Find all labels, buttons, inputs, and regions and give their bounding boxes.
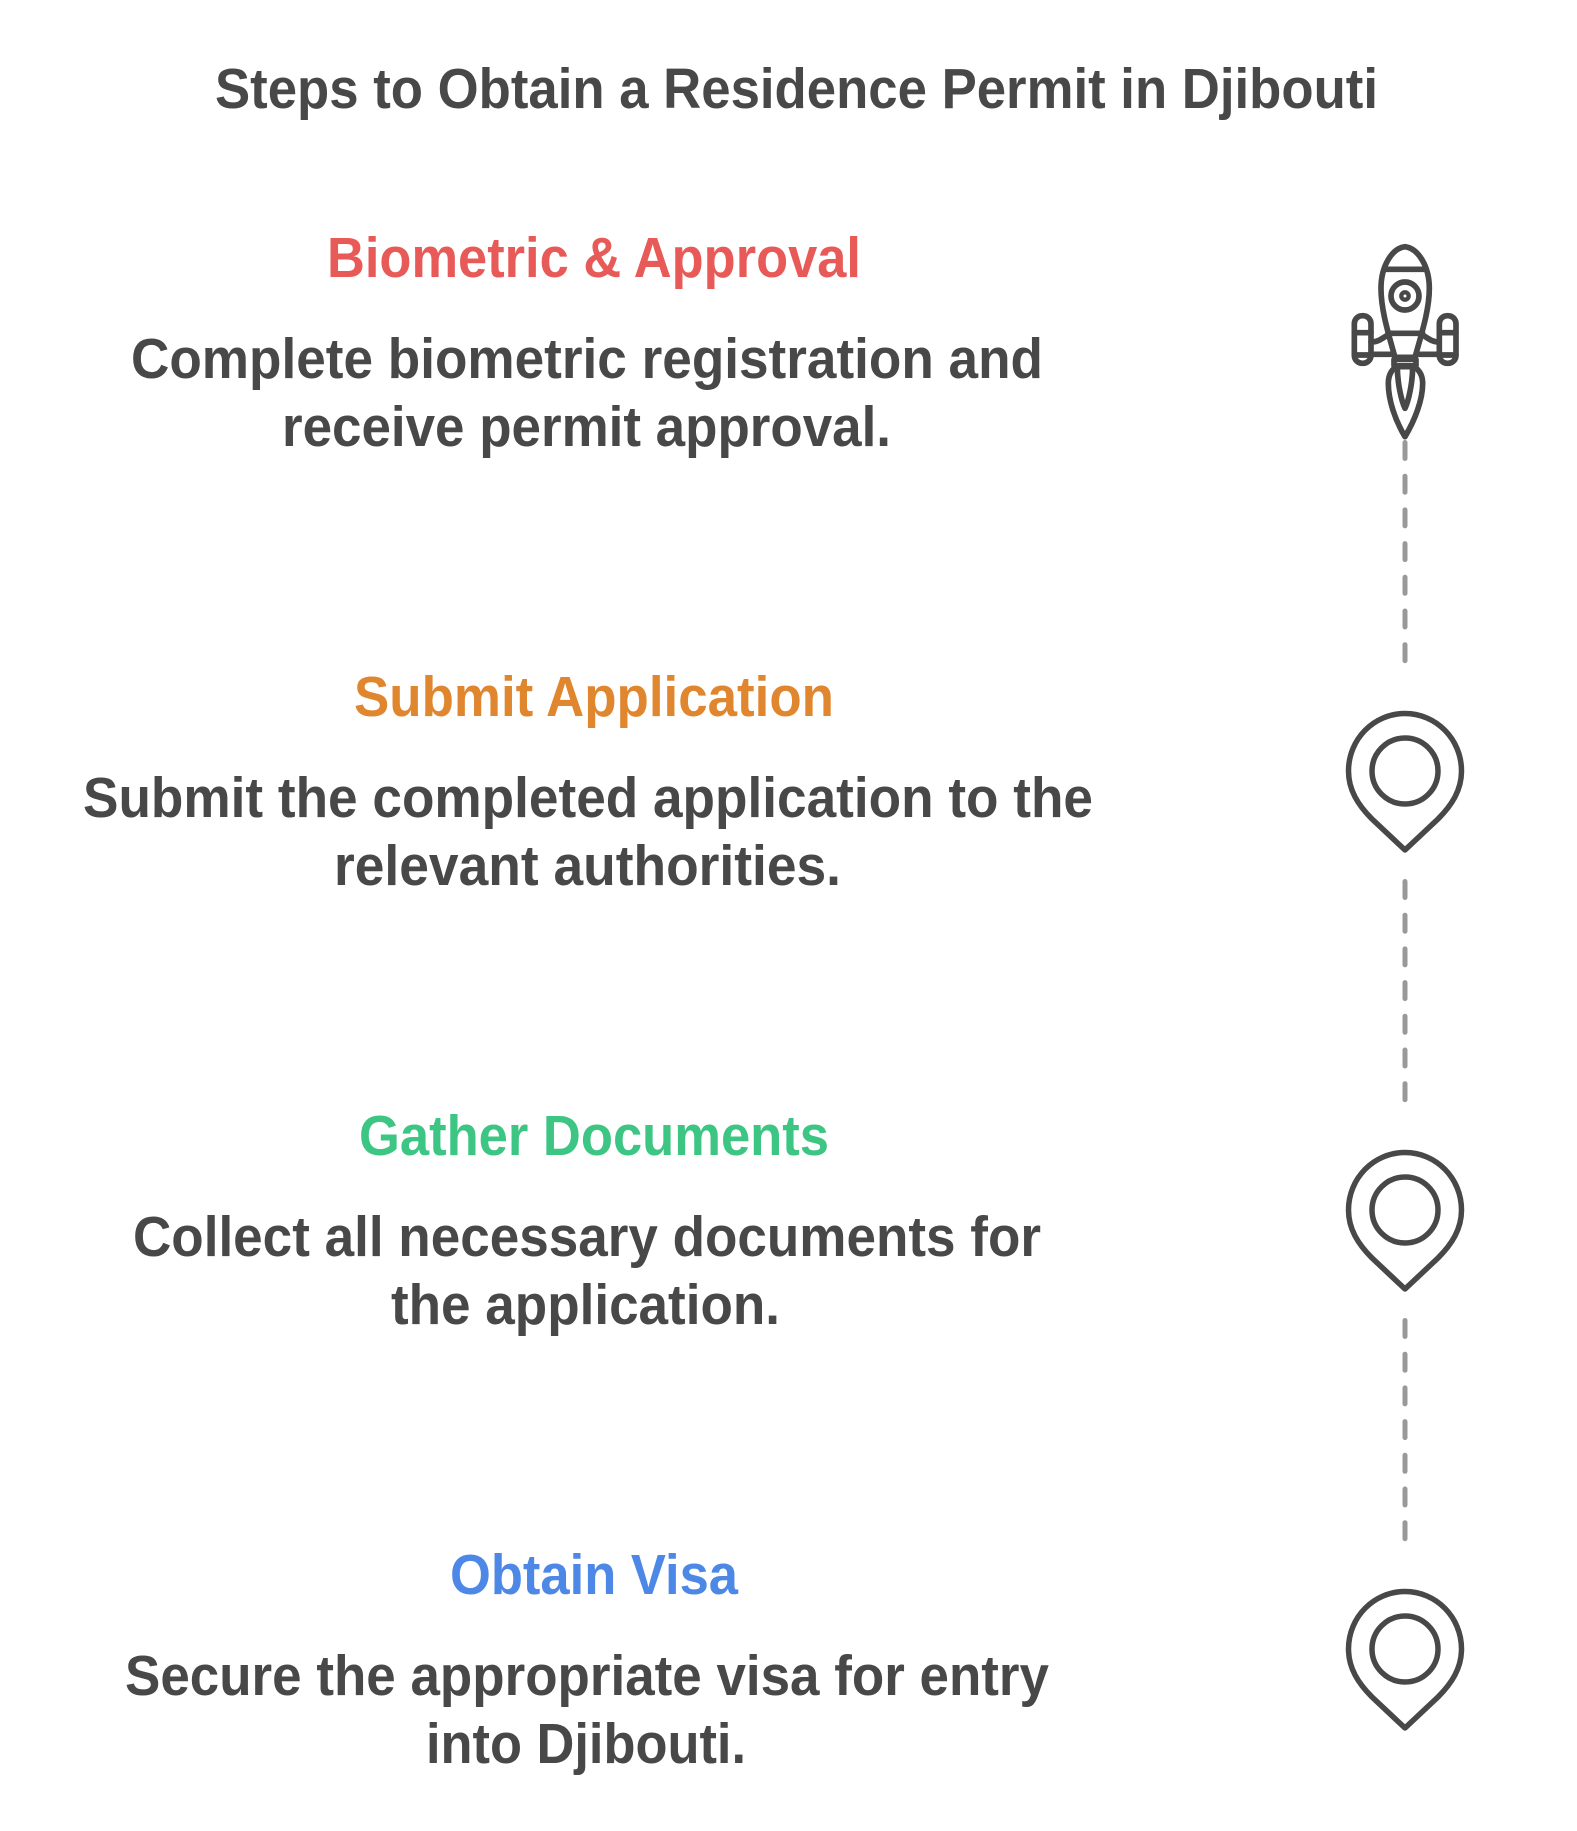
description: biometric registration: Complete biometric registration and [131, 327, 1043, 391]
step: Submit Application [83, 665, 1093, 898]
step: Biometric & Approval [131, 226, 1043, 459]
heading: Gather Documents: Gather Documents [359, 1104, 829, 1168]
connector: pin 1 to pin 2 [1402, 882, 1408, 1101]
description: secure visa: Secure the appropriate visa for entry [125, 1644, 1049, 1708]
step: Gather Documents [133, 1104, 1041, 1337]
description: collect documents: Collect all necessary documents for [133, 1205, 1041, 1269]
icon: location pin 3 [1348, 1592, 1462, 1728]
title: Steps to Obtain a Residence Permit in Djibouti [215, 57, 1378, 121]
connector: rocket to pin [1402, 442, 1408, 662]
heading: Submit Application: Submit Application [354, 665, 834, 729]
description: submit application [83, 766, 1093, 898]
connector: pin 2 to pin 3 [1402, 1320, 1408, 1540]
description: collect documents [133, 1205, 1041, 1337]
description: secure visa: into Djibouti. [426, 1712, 746, 1776]
heading: Obtain Visa: Obtain Visa [450, 1543, 739, 1607]
description: biometric registration: receive permit approval. [282, 395, 891, 459]
icon: location pin 2 [1348, 1152, 1462, 1289]
description: secure visa [125, 1644, 1049, 1776]
description: submit application: Submit the completed application to the [83, 766, 1093, 830]
icon: location pin 1 [1348, 714, 1462, 850]
icon: rocket [1354, 247, 1456, 437]
description: collect documents: the application. [391, 1273, 780, 1337]
description: biometric registration [131, 327, 1043, 459]
description: submit application: relevant authorities. [334, 834, 841, 898]
heading: Biometric & Approval: Biometric & Approval [327, 226, 861, 290]
step: Obtain Visa [125, 1543, 1049, 1776]
